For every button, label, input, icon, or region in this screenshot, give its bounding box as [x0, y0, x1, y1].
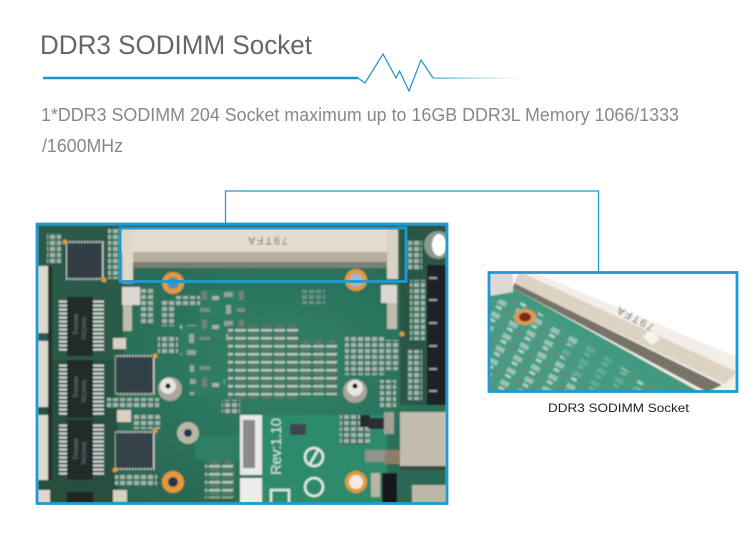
- ethernet transformers: TRC2400L: [82, 316, 88, 340]
- ethernet jacks: [400, 412, 446, 503]
- central component clusters: [141, 288, 398, 498]
- small black regulators and capacitors: [62, 240, 404, 503]
- title underline with pulse: [43, 54, 519, 91]
- caption: DDR3 SODIMM Socket: [548, 401, 690, 415]
- right header connectors: [427, 265, 446, 405]
- ethernet transformers: Trxcom: [73, 377, 80, 398]
- ethernet transformers: Trxcom: [73, 314, 80, 335]
- ethernet transformers: Trxcom: [73, 439, 80, 460]
- detail photo frame: [489, 272, 737, 392]
- title: DDR3 SODIMM Socket: [40, 30, 312, 60]
- silkscreen marks: [271, 448, 323, 506]
- highlight box around socket: [120, 228, 406, 282]
- description text: [41, 105, 679, 156]
- panel: socket detail photo: 79TFA: [615, 303, 656, 333]
- ethernet transformers: TRC2400L: [82, 379, 88, 403]
- memory socket: 79TFA: [247, 234, 288, 246]
- edge pad clusters: [47, 229, 425, 485]
- silkscreen revision text: Rev:1.10: [268, 418, 285, 475]
- ethernet transformers: TRC2400L: [82, 441, 88, 465]
- description text: 1*DDR3 SODIMM 204 Socket maximum up to 16GB DDR3L Memory 1066/1333: [41, 105, 679, 125]
- ethernet transformers: [59, 297, 104, 503]
- left side connectors: [38, 266, 50, 503]
- connector line from board highlight to detail photo: [226, 191, 598, 272]
- board frame: [37, 224, 447, 504]
- mounting holes: [158, 231, 452, 493]
- memory socket: [121, 226, 398, 331]
- QFP chips: [65, 241, 155, 470]
- serial sticker: [240, 415, 262, 503]
- panel: socket detail photo: [489, 272, 737, 392]
- description text: /1600MHz: [42, 136, 123, 156]
- panel: main board photo: [37, 224, 452, 506]
